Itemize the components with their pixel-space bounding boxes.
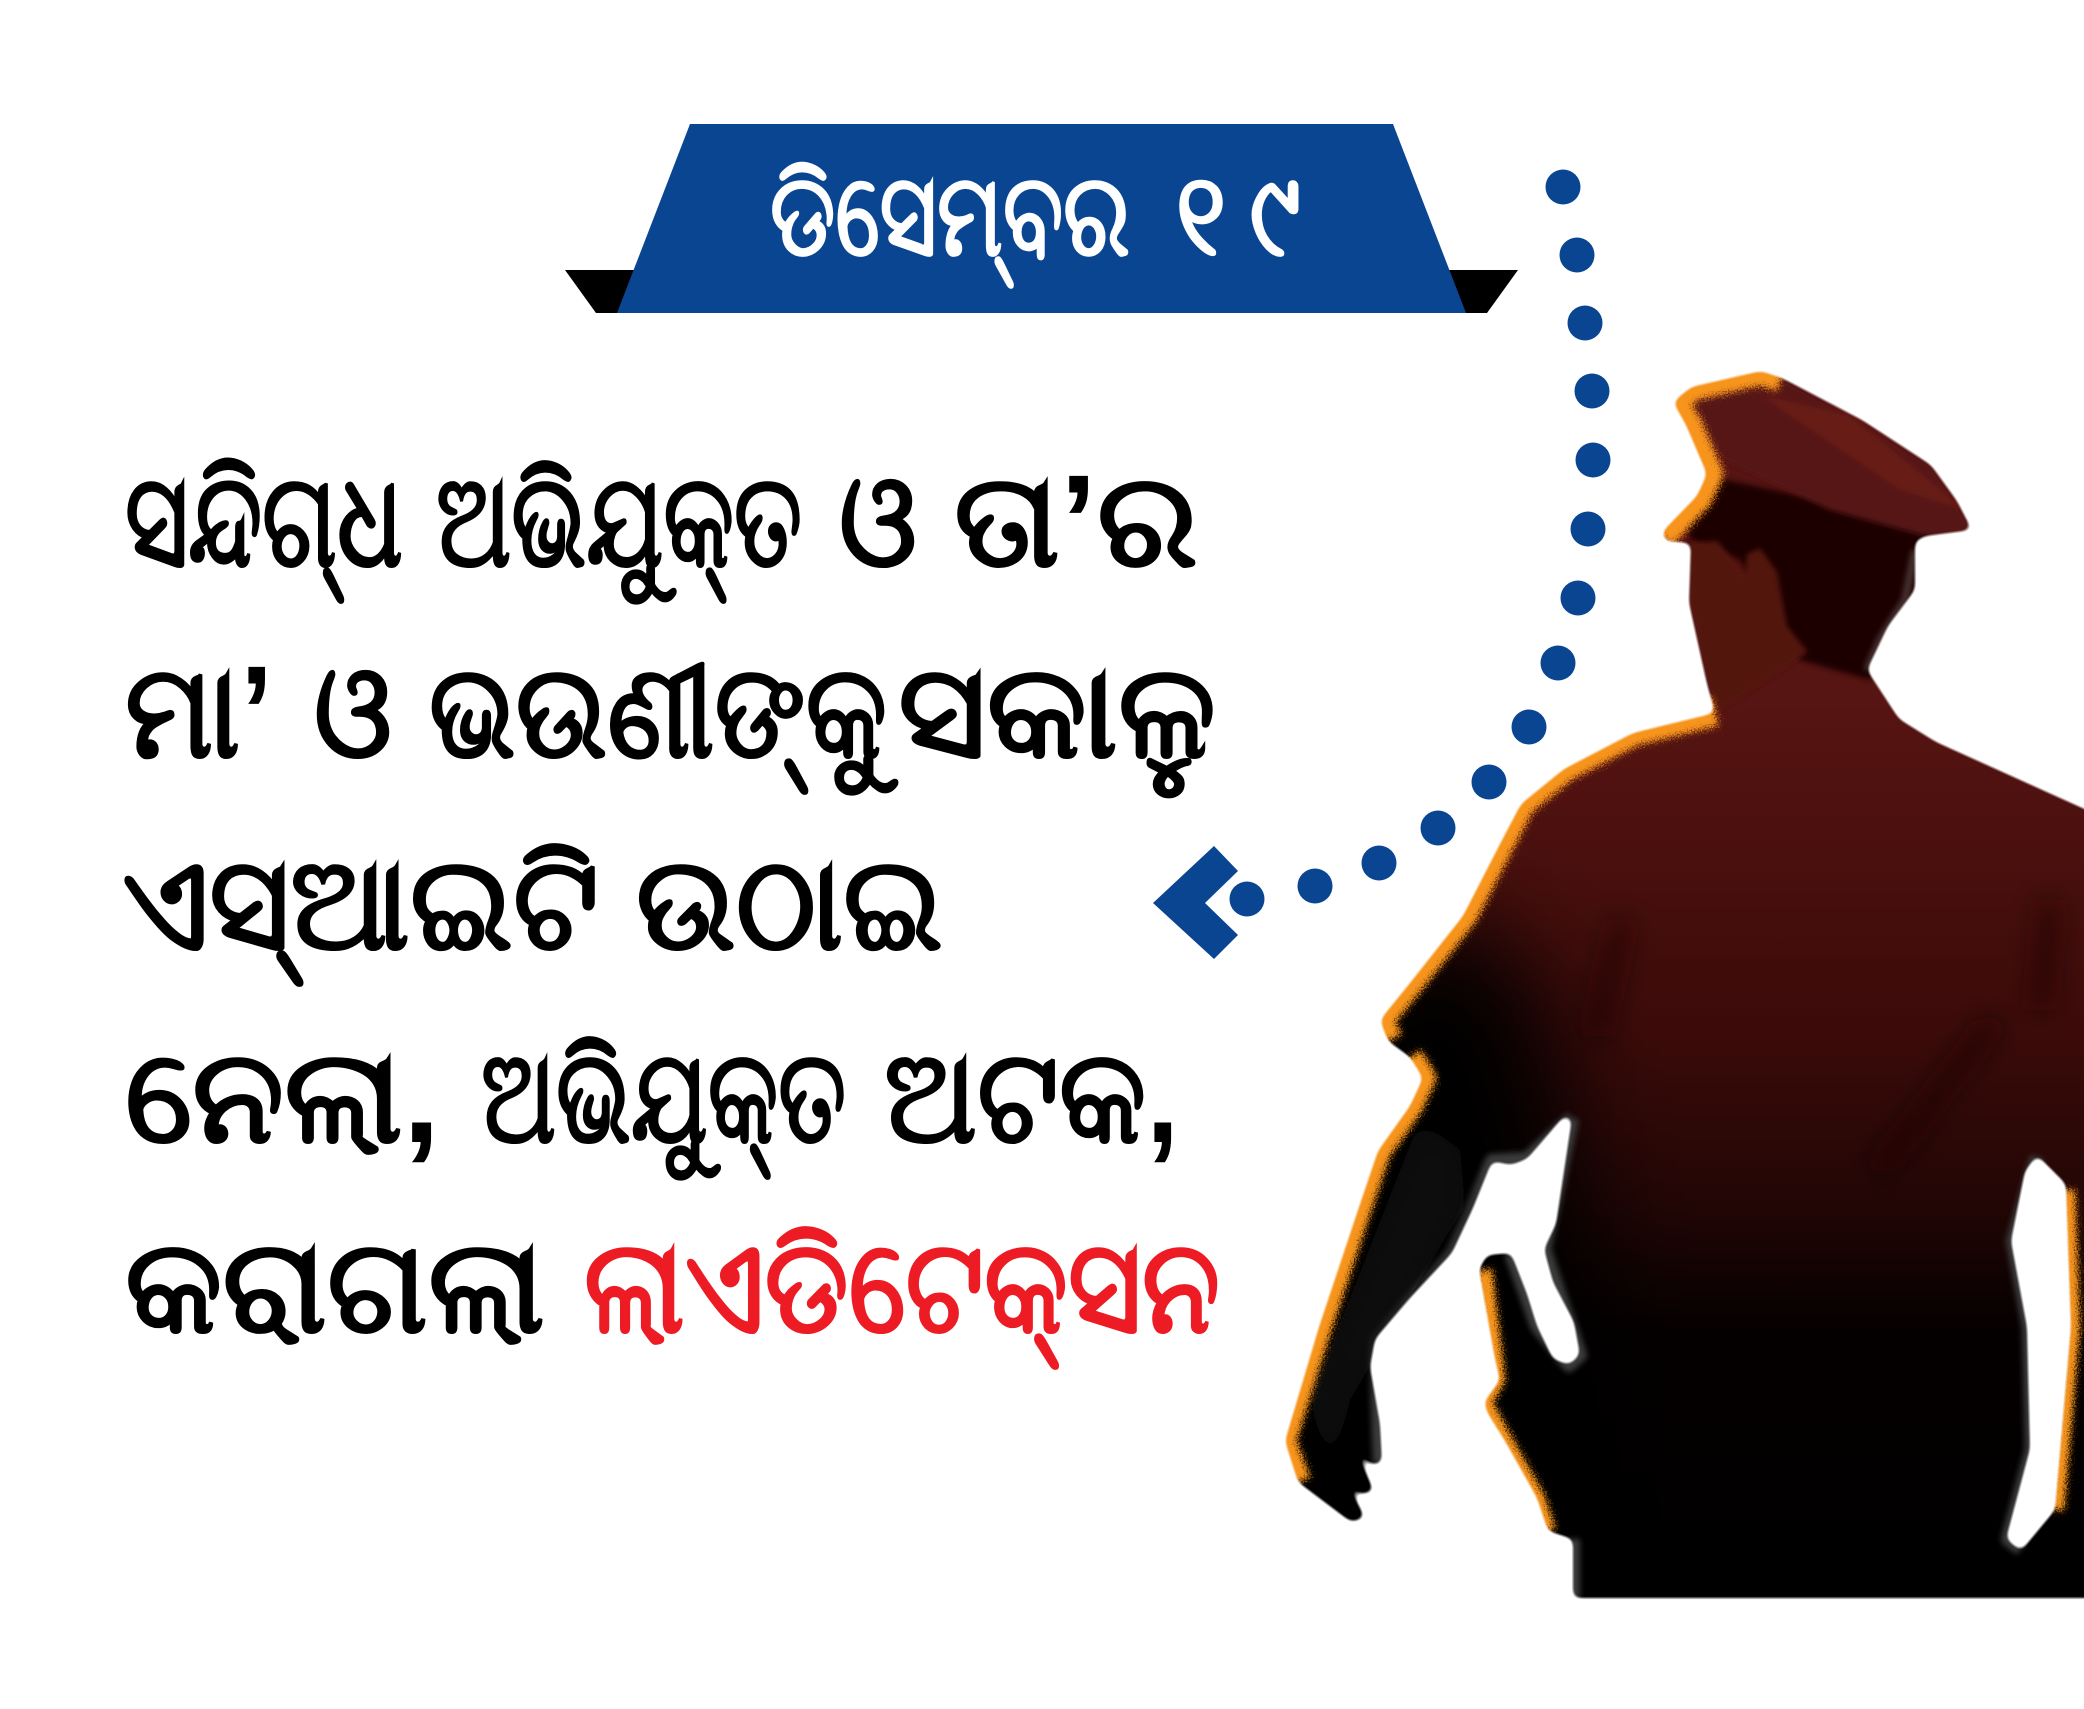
line 3: ଏସ୍‌ଆଇଟି	[122, 830, 599, 988]
shirt fold shadows	[1596, 900, 2050, 1171]
line 2: ମା’	[125, 638, 273, 785]
banner date text: ୯	[1249, 150, 1301, 280]
line 4: ଅଭିଯୁକ୍ତ	[481, 1023, 846, 1181]
arm highlight	[1310, 1120, 1465, 1480]
line 2: ସକାଳୁ	[898, 638, 1216, 799]
dotted line	[1230, 170, 1610, 916]
head shadow	[1686, 476, 1942, 682]
banner date text: ଡିସେମ୍ବର	[770, 150, 1130, 289]
dotted arrow	[1153, 170, 1610, 959]
line 4	[125, 1023, 1179, 1181]
highlighted red word: ଲାଏଡିଟେକ୍ସନ	[584, 1213, 1220, 1371]
line 4: ନେଲା,	[125, 1023, 440, 1170]
line 1: ଓ	[839, 447, 917, 594]
line 1: ସନ୍ଦିଗ୍ଧ	[125, 447, 403, 605]
grey rim on lower edges	[1375, 1118, 2037, 1598]
arrow head	[1153, 846, 1238, 959]
orange rim light	[1283, 369, 2073, 1531]
line 5: କରାଗଲା	[125, 1213, 545, 1360]
date banner	[565, 124, 1518, 313]
banner date text: ୧	[1176, 150, 1226, 280]
banner trapezoid	[617, 124, 1466, 313]
line 2	[125, 638, 1216, 799]
headline text block	[122, 447, 1220, 1371]
line 3	[122, 830, 943, 988]
face and ear	[1689, 541, 1808, 712]
body fill	[1270, 360, 2084, 1605]
banner right fold	[1438, 270, 1518, 313]
banner left fold	[565, 270, 645, 313]
line 1: ଅଭିଯୁକ୍ତ	[436, 447, 802, 605]
illustration: police officer silhouette	[1270, 360, 2084, 1620]
line 2: ଭଉଣୀଙ୍କୁ	[429, 638, 899, 796]
line 1: ତା’ର	[954, 447, 1198, 594]
line 1	[125, 447, 1198, 605]
line 2: ଓ	[314, 638, 392, 785]
neck highlight	[1867, 550, 1915, 670]
hat	[1768, 397, 1962, 538]
arm and hip shadow	[1346, 886, 1616, 1316]
line 4: ଅଟକ,	[884, 1023, 1179, 1170]
line 3: ଉଠାଇ	[636, 830, 943, 977]
